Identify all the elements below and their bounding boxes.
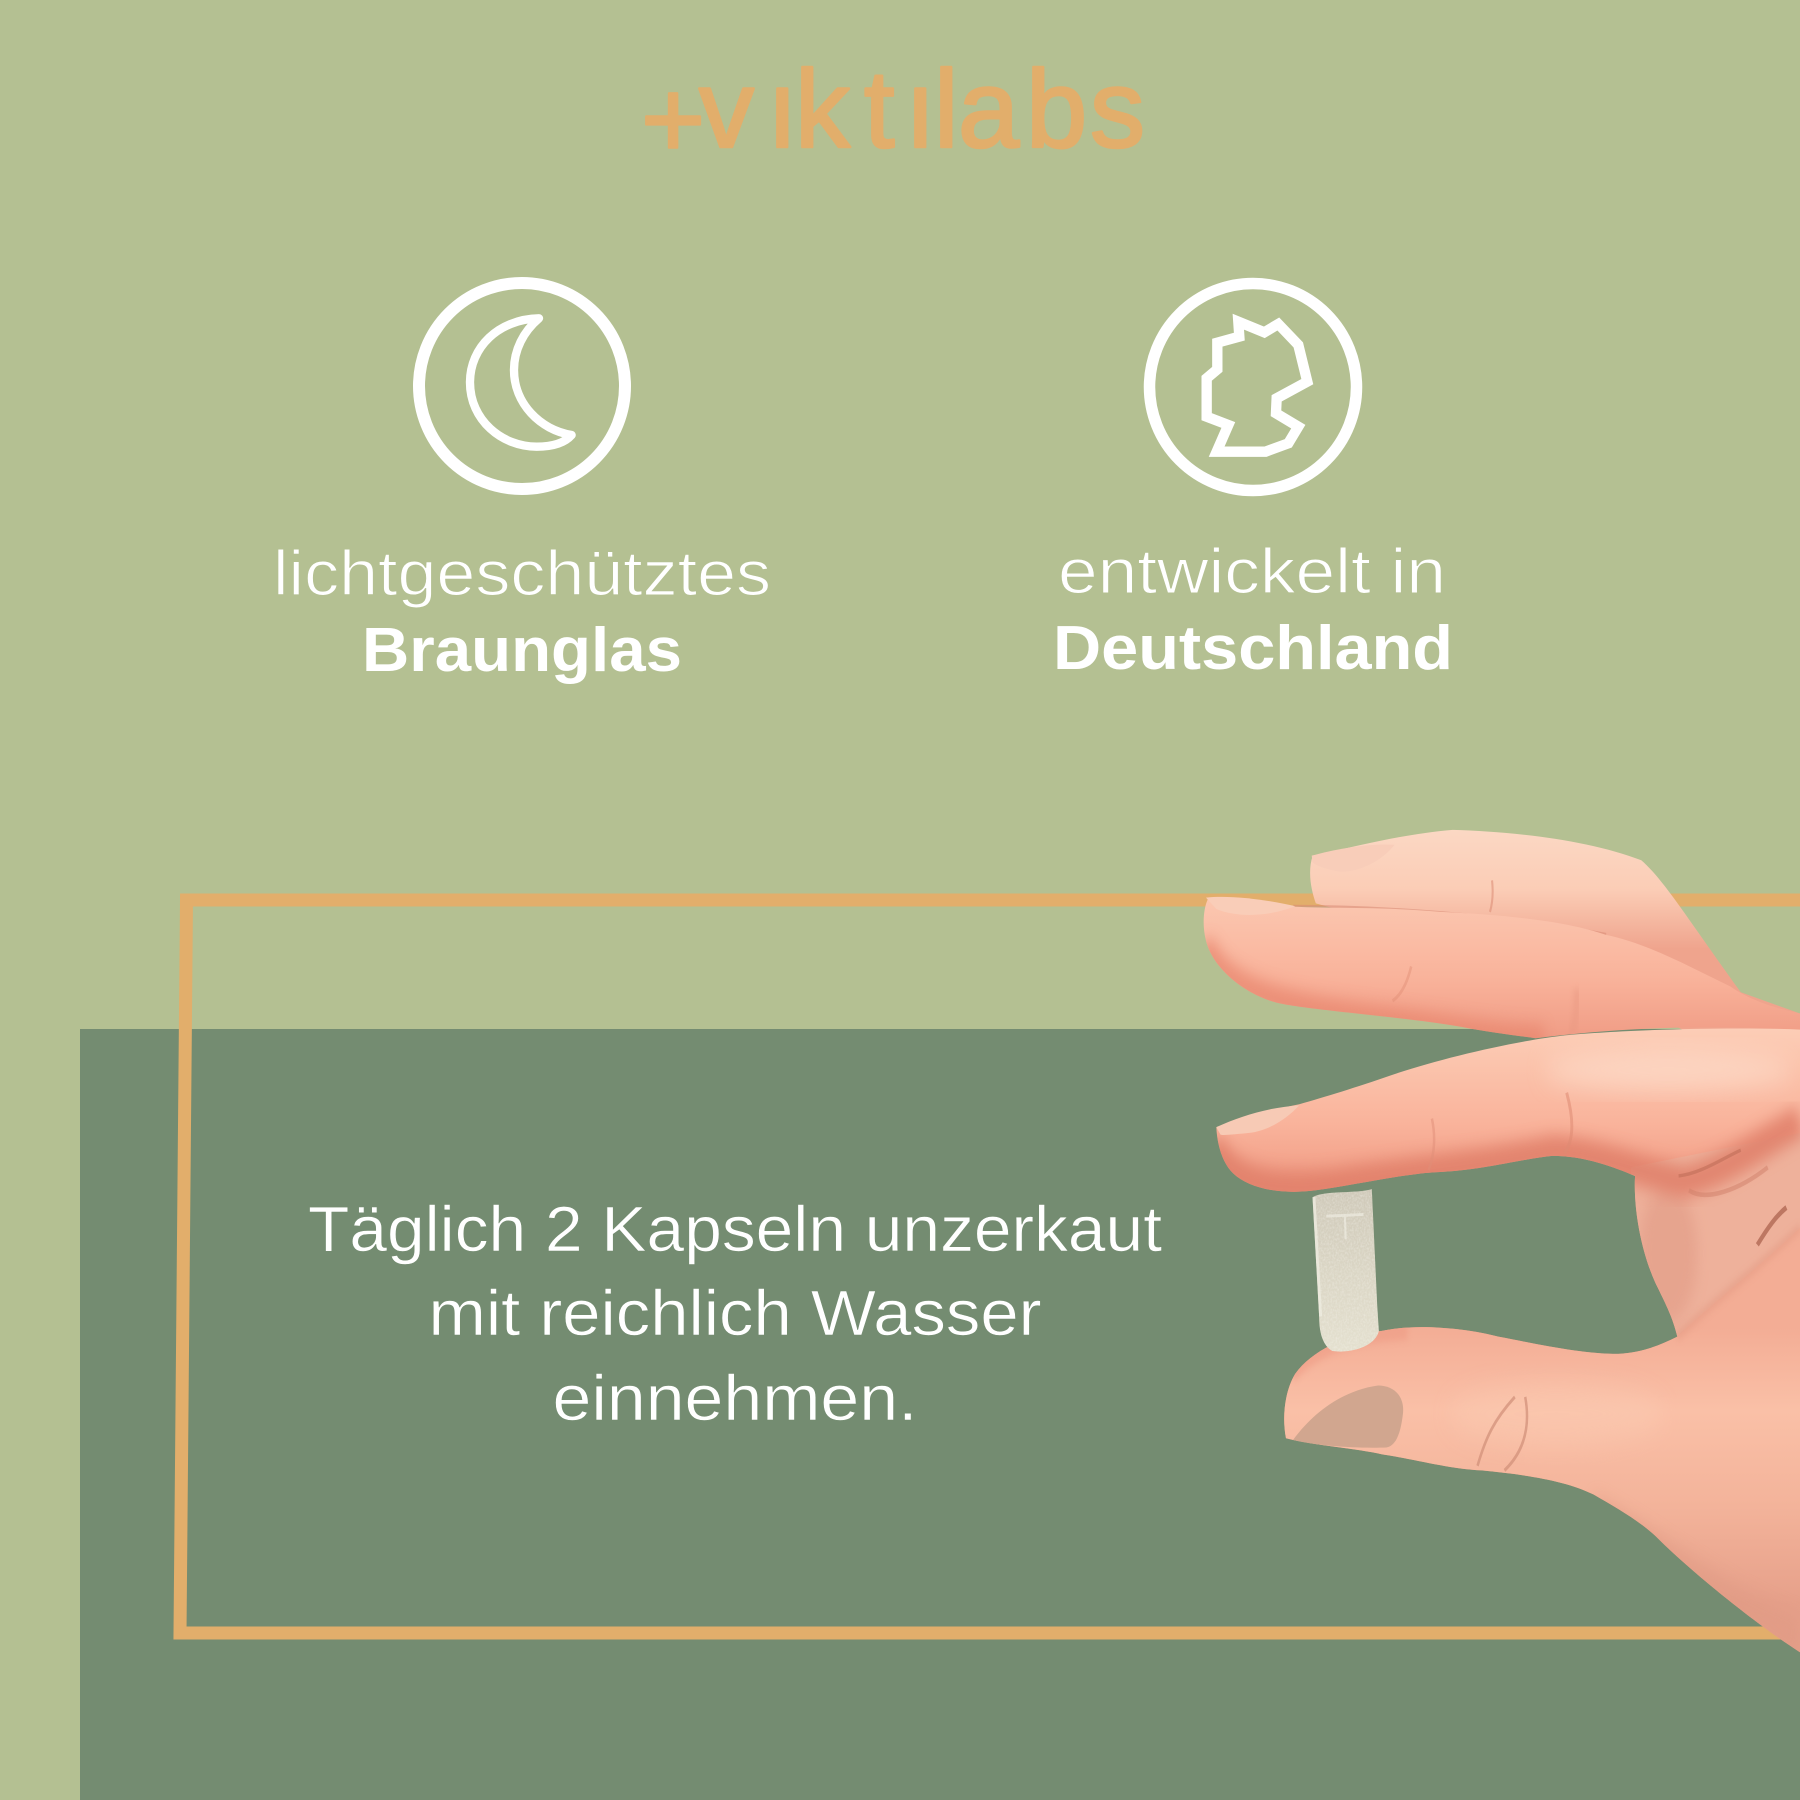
thumb base: [1274, 1228, 1800, 1661]
text: dosage instruction: [308, 1193, 1162, 1434]
text: entwickelt in Deutschland: Deutschland: [1053, 614, 1453, 683]
palm: [1631, 1133, 1800, 1340]
hand holding capsule: [1204, 830, 1800, 1661]
text: lichtgeschütztes Braunglas: Braunglas: [362, 616, 682, 685]
finger under-shading: [1212, 1121, 1800, 1187]
text: dosage instruction: Täglich 2 Kapseln unzerkaut: [308, 1193, 1162, 1265]
text: lichtgeschütztes Braunglas: lichtgeschütztes: [273, 539, 771, 609]
middle finger: [1204, 897, 1800, 1038]
back finger: [1293, 830, 1800, 1087]
text: dosage instruction: mit reichlich Wasser: [428, 1277, 1042, 1349]
panel: dark green dosage panel: [80, 1029, 1800, 1800]
text: entwickelt in Deutschland: entwickelt in: [1058, 537, 1446, 607]
logo: viktilabs: +vıktılabs: [641, 48, 1145, 181]
thumb nail: [1293, 1385, 1403, 1448]
text: dosage instruction: einnehmen.: [552, 1362, 918, 1434]
lower finger, palm and thumb: [1212, 1028, 1800, 1661]
text: entwickelt in Deutschland: [1053, 537, 1453, 683]
text: lichtgeschütztes Braunglas: [273, 539, 771, 685]
gold frame: [180, 900, 1800, 1633]
capsule: [1312, 1189, 1379, 1352]
icon: Germany outline in circle: [1150, 284, 1356, 490]
icon: moon in circle: [419, 283, 625, 489]
feature: light-protected brown glass: [273, 283, 771, 685]
feature: developed in Germany: [1053, 284, 1453, 683]
